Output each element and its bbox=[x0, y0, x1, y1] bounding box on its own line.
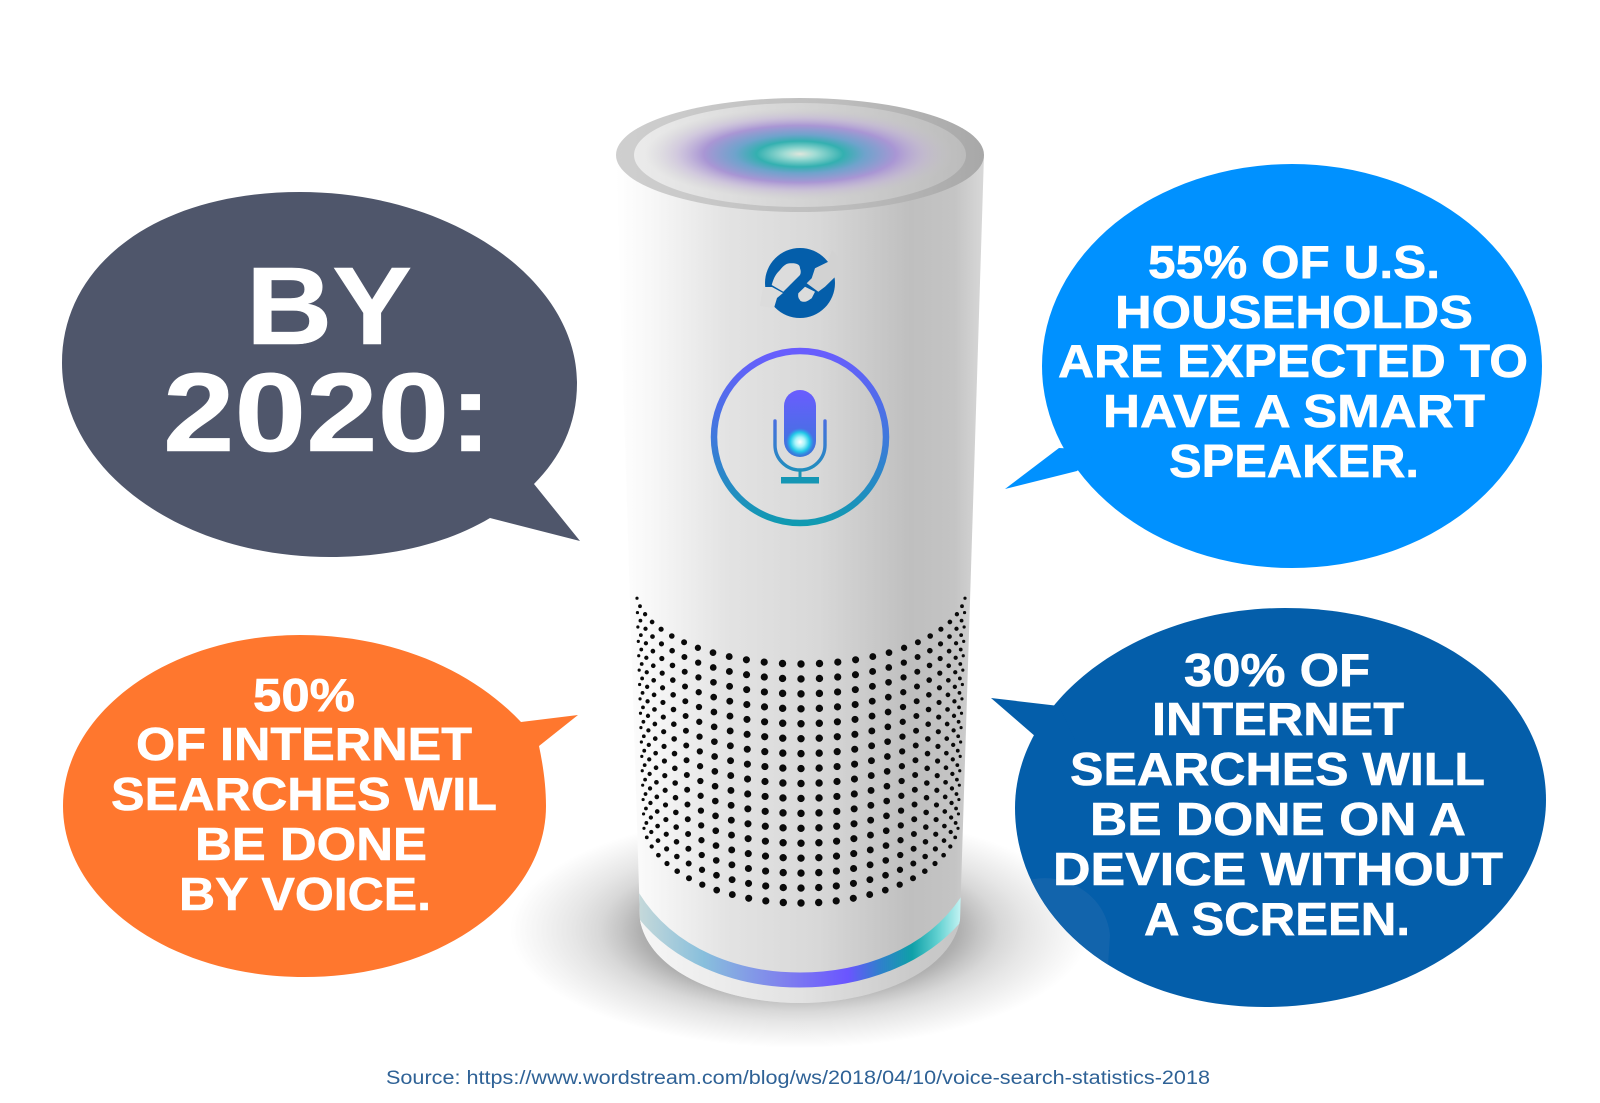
speech bubble: by 2020: 2020: bbox=[163, 350, 492, 475]
speaker body bbox=[616, 155, 984, 1003]
text: screenless search stat: A SCREEN. bbox=[1144, 893, 1410, 945]
text: smart speaker stat: 55% OF U.S. bbox=[1148, 236, 1440, 288]
text: smart speaker stat: ARE EXPECTED TO bbox=[1058, 335, 1528, 387]
text: smart speaker stat: HOUSEHOLDS bbox=[1115, 286, 1473, 338]
text: voice search stat: BE DONE bbox=[195, 818, 427, 870]
bubble highlight bbox=[1030, 878, 1110, 965]
text: screenless search stat: DEVICE WITHOUT bbox=[1053, 843, 1503, 895]
text: screenless search stat bbox=[1053, 644, 1503, 945]
text: smart speaker stat bbox=[1058, 236, 1528, 487]
text: screenless search stat: INTERNET bbox=[1152, 693, 1404, 745]
text: screenless search stat: 30% OF bbox=[1184, 644, 1370, 696]
speaker grille dots bbox=[637, 598, 965, 903]
text: voice search stat bbox=[111, 669, 497, 920]
source line: Source: https://www.wordstream.com/blog/ws/2018/04/10/voice-search-statistics-2018 bbox=[386, 1068, 1210, 1089]
brand logo bbox=[760, 248, 842, 318]
speaker floor shadow bbox=[510, 812, 1090, 1048]
text: voice search stat: SEARCHES WIL bbox=[111, 768, 497, 820]
heading: by 2020: BY bbox=[246, 245, 412, 368]
LED light band bbox=[632, 896, 968, 980]
top rim bbox=[616, 98, 984, 212]
top disc bbox=[634, 103, 966, 207]
microphone ring bbox=[714, 351, 886, 523]
text: smart speaker stat: HAVE A SMART bbox=[1103, 385, 1485, 437]
top light glow bbox=[645, 108, 955, 200]
microphone icon bbox=[775, 390, 825, 484]
speaker base section bbox=[640, 914, 936, 1003]
text: screenless search stat: BE DONE ON A bbox=[1090, 793, 1466, 845]
speech bubble: 30 percent bbox=[991, 608, 1546, 1007]
speech bubble: by 2020 bbox=[62, 192, 580, 557]
speech bubble: 50 percent bbox=[63, 635, 578, 977]
text: screenless search stat: SEARCHES WILL bbox=[1070, 743, 1485, 795]
text: voice search stat: OF INTERNET bbox=[136, 718, 472, 770]
text: smart speaker stat: SPEAKER. bbox=[1169, 435, 1419, 487]
smart speaker bbox=[616, 98, 984, 1010]
text: voice search stat: 50% bbox=[253, 669, 355, 721]
text: voice search stat: BY VOICE. bbox=[179, 868, 431, 920]
speech bubble: 55 percent bbox=[1005, 164, 1542, 568]
